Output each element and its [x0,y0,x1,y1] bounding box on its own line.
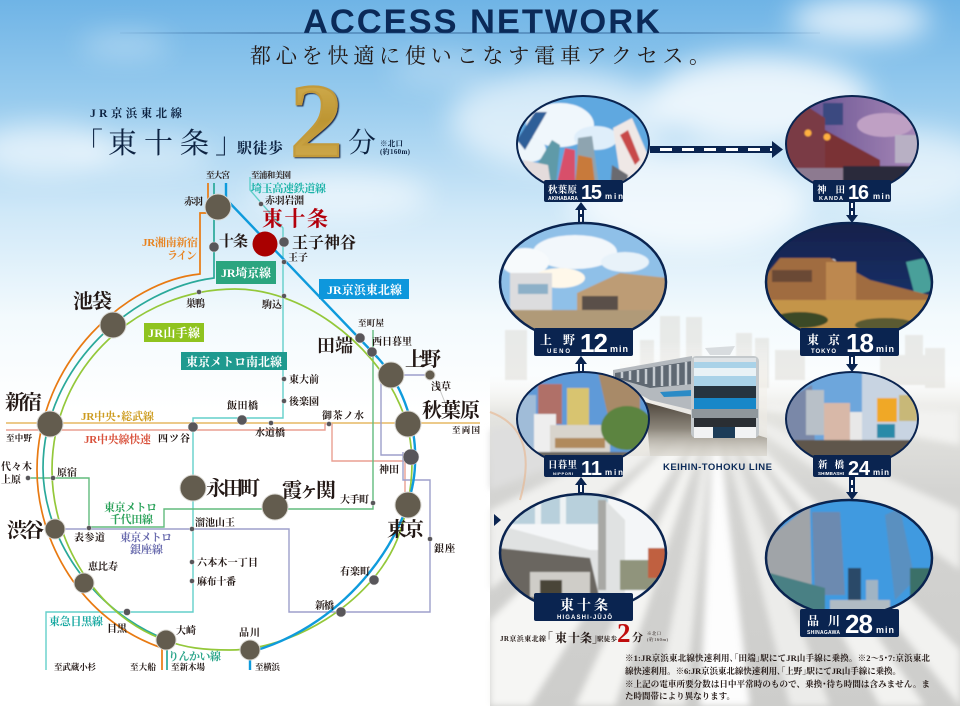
time label: Nippori 11 min: NIPPORI [553,471,573,476]
small station names: 東大前 [289,373,319,386]
headline: walk time to Higashi-Jujo: 2 [290,62,342,179]
small station names: 後楽園 [289,395,319,408]
coloured line names: 千代田線 [110,512,153,526]
terminus labels: 至浦和美園 [251,170,291,180]
time label: Tokyo 18 min: 18 [846,328,874,358]
small station names: 表参道 [74,531,105,544]
line label: JR Saikyo [216,261,276,284]
line: Keihin-Tohoku [226,183,415,670]
coloured line names: 東京メトロ [104,500,157,514]
line label: JR Saikyo: JR埼京線 [221,265,271,280]
coloured line names: 東急目黒線 [49,614,103,628]
large station names [5,233,481,542]
footnotes: ※上記の電車所要分数は日中平常時のもので、乗換･待ち時間は含みません。ま [625,679,930,689]
time label: Shimbashi 24 min [813,455,891,480]
line: Saikyo and Rinkai [43,183,214,670]
coloured line names: JR中央･総武線 [81,409,154,423]
time label: Kanda 16 min: 16 [848,182,869,204]
small station names: 大手町 [340,493,369,506]
small station names: 大崎 [176,624,196,637]
start marker [494,514,501,526]
large station names: 十条 [219,233,248,250]
arrow: Higashi-Jujo to Nippori [575,477,587,493]
background: faded city skyline [505,316,945,388]
headline: walk time to Higashi-Jujo: 「東十条」 [74,127,244,160]
time label: Akihabara 15 min: AKIHABARA [548,196,578,202]
walk time caption: ※北口 [647,630,662,637]
small station names: 巣鴨 [186,297,205,310]
red station name: 東十条 [262,207,328,231]
time label: Shinagawa 28 min [800,609,899,639]
station photo: Tokyo [764,222,934,331]
small station names: 有楽町 [340,565,370,578]
large station names: 新宿 [5,390,42,414]
main title: ACCESS NETWORK [303,3,660,41]
footnotes [625,653,930,701]
terminus labels: 至武蔵小杉 [54,662,96,672]
name label: Higashi-Jujo: HIGASHI-JŪJŌ [557,614,612,621]
line label: JR Yamanote: JR山手線 [148,325,200,340]
train caption: KEIHIN-TOHOKU LINE [663,462,772,473]
terminus labels: 至大船 [130,662,156,672]
time label: Kanda 16 min [813,180,891,204]
terminus labels: 至両国 [452,425,480,435]
time label: Shimbashi 24 min: SHIMBASHI [818,471,844,476]
line: Namboku and Saitama Rapid [46,177,283,670]
time label: Nippori 11 min: min [605,468,623,477]
time label: Tokyo 18 min: TOKYO [811,349,836,355]
small station names: 飯田橋 [227,399,258,412]
line label: JR Keihin-Tohoku: JR京浜東北線 [327,282,402,297]
time label: Tokyo 18 min: 東 京 [807,332,841,347]
name label: Higashi-Jujo [534,593,633,621]
headline: walk time to Higashi-Jujo: ※北口 [380,139,403,148]
small station names: 目黒 [107,622,128,635]
large station names: 王子神谷 [292,233,356,252]
line: Asakusa connector [436,380,450,415]
time label: Kanda 16 min: 神 田 [817,184,845,196]
station photo: Higashi-Jujo [498,492,668,602]
time label: Nippori 11 min: 日暮里 [548,459,577,471]
major stations [37,194,435,660]
minor stations [26,202,432,617]
small station names: 品川 [239,627,260,639]
terminus labels: 至中野 [6,433,32,443]
time label: Shinagawa 28 min: min [876,625,894,635]
line label: Tokyo Metro Namboku: 東京メトロ南北線 [186,354,282,369]
large station names: 渋谷 [7,519,44,542]
time label: Kanda 16 min: KANDA [819,196,843,202]
small station names: 溜池山王 [195,516,235,529]
arrow: Shimbashi to Shinagawa [846,477,858,500]
highlighted station: Higashi-Jujo [252,232,278,256]
background: motion-blur rail streaks [490,375,960,706]
arrow: Akihabara to Kanda [650,141,783,158]
coloured line names [49,181,326,663]
walk time caption [500,618,668,648]
time label: Akihabara 15 min: 秋葉原 [548,184,577,196]
time label: Akihabara 15 min: 15 [581,182,602,204]
terminus labels: 至大宮 [206,170,230,180]
small station names: 王子 [288,251,308,264]
terminus labels [6,170,480,672]
large station names: 池袋 [73,290,112,313]
coloured line names: ライン [167,249,197,262]
small station names: 御茶ノ水 [322,409,364,422]
station photo: Ueno [498,222,668,331]
large station names: 田端 [317,335,353,356]
line: Shonan-Shinjuku [37,183,208,670]
footnotes: ※1:JR京浜東北線快速利用､｢田端｣駅にてJR山手線に乗換。※2～5･7:京浜東北 [625,653,930,663]
headline: walk time to Higashi-Jujo: 分 [348,127,376,159]
large station names: 東京 [387,517,425,541]
small station names: 恵比寿 [88,560,118,573]
large station names: 永田町 [206,476,260,500]
walk time caption: 駅徒歩 [596,634,618,643]
small station names: 六本木一丁目 [197,556,258,569]
station photo: Akihabara [516,95,650,184]
small station names: 浅草 [431,380,451,393]
station photo: Kanda [785,95,919,184]
station photo: Nippori [516,371,650,458]
small station names: 四ツ谷 [158,432,190,445]
small station names: 麻布十番 [197,575,236,588]
line: Ginza [55,375,430,612]
time label: Tokyo 18 min: min [876,344,894,354]
terminus labels: 至横浜 [255,662,280,672]
large station names: 霞ヶ関 [282,479,336,502]
small station names: 神田 [379,463,399,476]
terminus labels: 至新木場 [171,662,205,672]
time label: Ueno 12 min: UENO [547,349,570,355]
arrow: Kanda to Tokyo [846,202,858,223]
station photo: Shimbashi [785,371,919,458]
line label: JR Keihin-Tohoku [319,279,409,299]
train photo [613,340,767,456]
small station names: 赤羽 [184,195,203,208]
time label: Shinagawa 28 min: 品 川 [807,614,840,628]
name label: Higashi-Jujo: 東十条 [560,597,608,614]
small station names: 西日暮里 [372,335,412,348]
route map [1,170,481,672]
coloured line names: りんかい線 [168,649,221,663]
small station names: 銀座 [434,542,456,555]
arrow: Tokyo to Shimbashi [846,356,858,372]
time label: Nippori 11 min [544,455,623,480]
small station names: 上原 [1,473,22,486]
line: Chiyoda [28,330,373,527]
coloured line names: JR湘南新宿 [142,235,198,249]
walk time caption: (約160m) [647,636,668,643]
time label: Akihabara 15 min: min [605,192,623,201]
headline: walk time to Higashi-Jujo [74,62,411,179]
time label: Ueno 12 min [534,328,633,358]
time label: Shimbashi 24 min: min [873,468,889,477]
walk time caption: 2 [617,618,630,648]
headline: walk time to Higashi-Jujo: JR京浜東北線 [90,106,182,120]
headline: walk time to Higashi-Jujo: (約160m) [380,147,411,156]
large station names: 上野 [405,348,441,371]
time label: Kanda 16 min: min [873,192,890,201]
small station names: 原宿 [57,466,77,479]
line: Yamanote [52,289,412,650]
arrow: Ueno to Akihabara [575,202,587,223]
terminus labels: 至町屋 [358,318,384,328]
walk time caption: JR京浜東北線 [500,634,546,643]
coloured line names: 埼玉高速鉄道線 [251,181,326,195]
station photo: Shinagawa [764,498,934,618]
time label: Shimbashi 24 min: 新 橋 [818,459,844,471]
small station names: 赤羽岩淵 [265,194,304,207]
line: Chuo Rapid [6,424,405,492]
time label: Ueno 12 min: 上 野 [540,332,575,347]
coloured line names: 銀座線 [130,542,163,556]
walk time caption: 分 [632,630,643,644]
walk time caption: 「東十条」 [541,630,604,645]
small station names: 水道橋 [255,426,285,439]
small station names [1,194,456,639]
time label: Nippori 11 min: 11 [581,458,602,480]
time label: Akihabara 15 min [544,180,623,204]
small station names: 駒込 [261,298,282,311]
small station names: 代々木 [1,460,32,473]
large station names: 秋葉原 [422,399,481,422]
footnotes: 線快速利用。※6:JR京浜東北線快速利用､｢上野｣駅にてJR山手線に乗換。 [625,666,901,676]
line label: JR Yamanote [144,323,204,342]
coloured line names: 東京メトロ [120,530,172,544]
time label: Shimbashi 24 min: 24 [848,458,871,480]
time label: Shinagawa 28 min: 28 [845,609,873,639]
headline: walk time to Higashi-Jujo: 駅徒歩 [236,139,284,157]
small station names: 新橋 [315,599,334,612]
footnotes: た時間帯により異なります。 [625,691,735,701]
line: Chuo-Sobu [6,422,480,424]
arrow: Nippori to Ueno [575,356,587,372]
coloured line names: JR中央線快速 [84,432,152,446]
time label: Ueno 12 min: min [610,344,628,354]
time label: Shinagawa 28 min: SHINAGAWA [807,630,840,636]
subtitle: 都心を快適に使いこなす電車アクセス。 [250,44,710,68]
time label: Tokyo 18 min [800,328,899,358]
time label: Ueno 12 min: 12 [580,328,608,358]
